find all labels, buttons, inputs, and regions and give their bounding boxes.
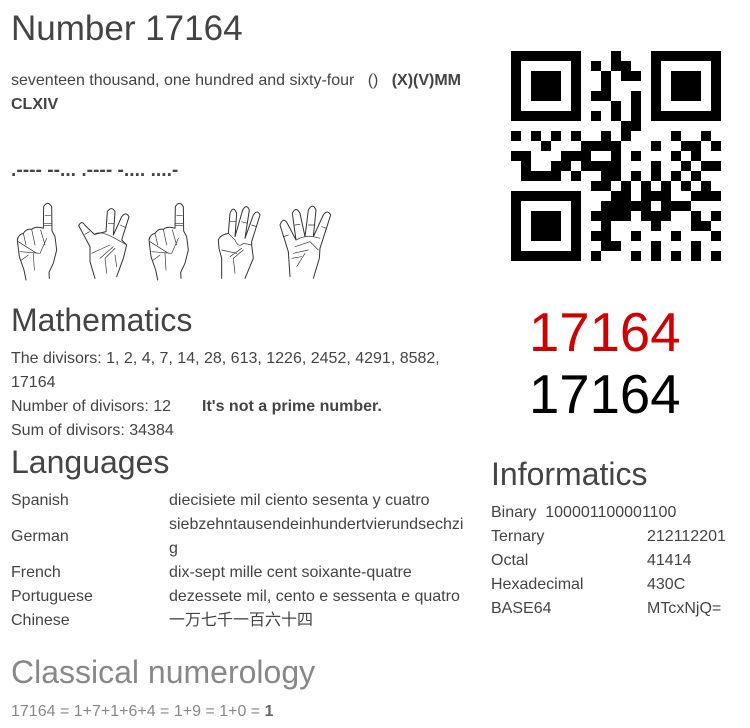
icon: hand one (17, 203, 57, 280)
numerology calculation: 17164 = 1+7+1+6+4 = 1+9 = 1+0 = 1 (11, 703, 273, 720)
red number: 17164 (529, 302, 681, 363)
black number: 17164 (529, 364, 681, 425)
title: Number 17164 (11, 9, 243, 48)
mathematics facts: The divisors: 1, 2, 4, 7, 14, 28, 613, 1226, 2452, 4291, 8582, 17164 Number of divisors: 12 Sum of divisors: 34384 (11, 350, 440, 439)
informatics values: 212112201 41414 430C MTcxNjQ= (647, 528, 726, 617)
icon: hand seven (79, 209, 129, 278)
qr code (511, 51, 721, 261)
sign language hands (16, 202, 332, 280)
heading: informatics: Informatics (491, 456, 647, 492)
icon: hand one repeated (149, 203, 188, 280)
heading: languages: Languages (11, 444, 169, 480)
icon: hand six (218, 207, 260, 278)
heading: classical numerology: Classical numerology (11, 654, 315, 690)
number in other languages: diecisiete mil ciento sesenta y cuatro siebzehntausendeinhundertvierundsechzi g dix-sept mille cent soixante-quatre dezessete mil, cento e sessenta e quatro 一万七千一百六十四 (169, 492, 463, 629)
icon: hand four (280, 206, 331, 278)
heading: mathematics: Mathematics (11, 302, 192, 338)
prime status: It's not a prime number. (202, 398, 382, 415)
informatics labels: Binary 100001100001100 Ternary Octal Hexadecimal BASE64 (491, 504, 676, 617)
morse code: .---- --... .---- -.... ....- (11, 160, 178, 181)
language names: Spanish German French Portuguese Chinese (11, 492, 93, 629)
number in words and roman numerals: seventeen thousand, one hundred and sixty-four () (X)(V)MM CLXIV (11, 72, 461, 113)
